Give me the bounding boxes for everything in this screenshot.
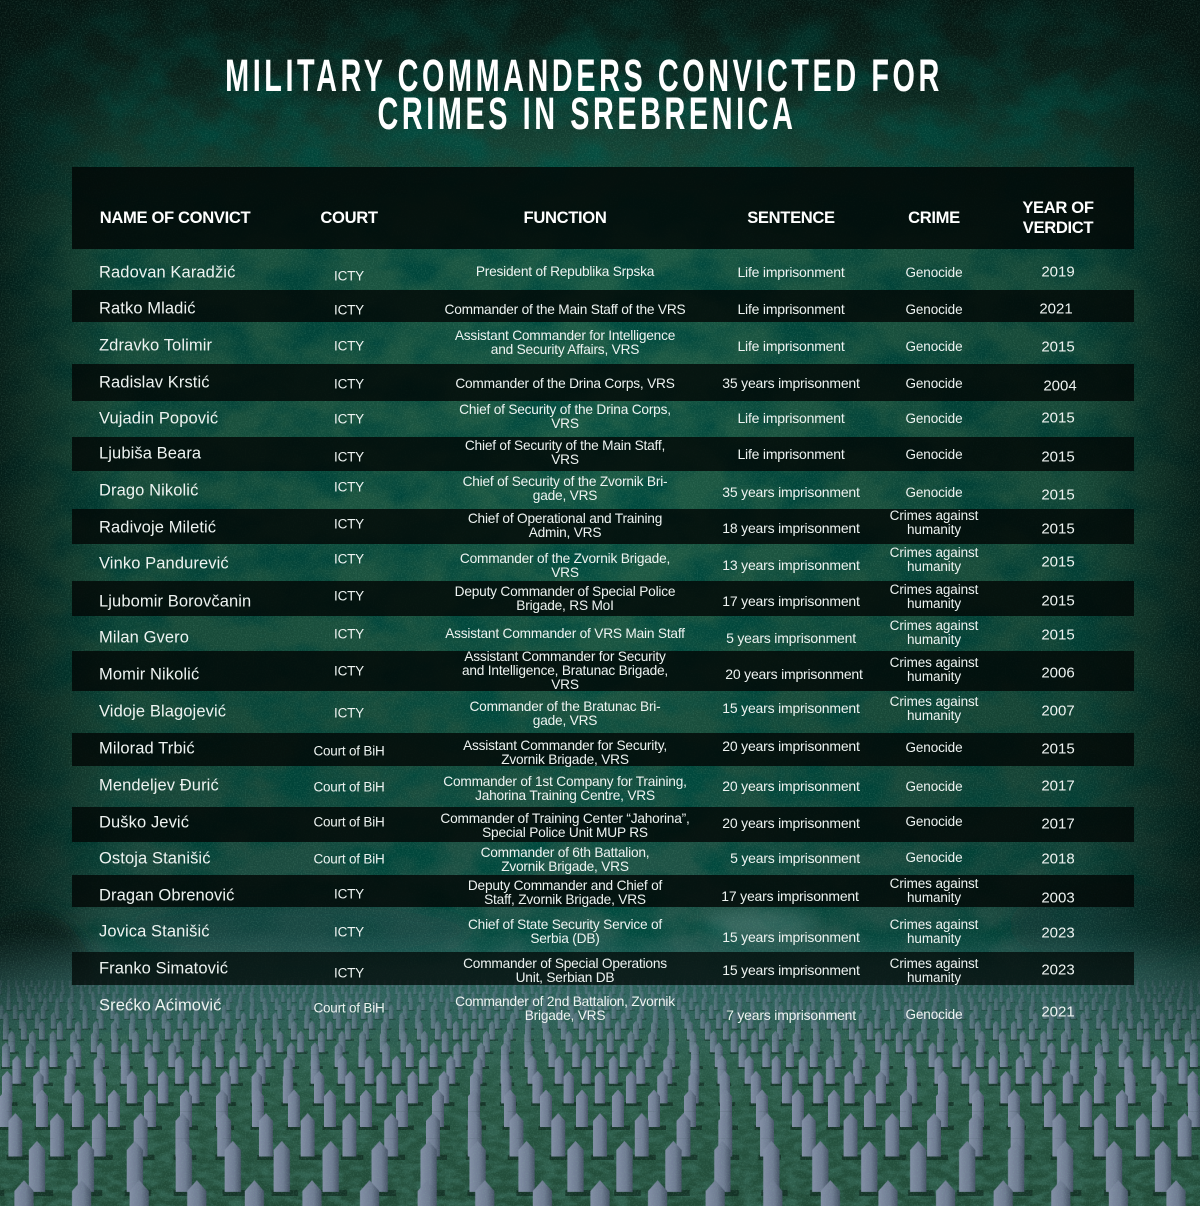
row: Franko Simatović: ICTY [334,966,364,980]
row: Jovica Stanišić [99,917,1075,946]
row: Ljubiša Beara: Life imprisonment [737,446,845,462]
row: Zdravko Tolimir: Zdravko Tolimir [99,336,212,354]
row: Duško Jević: Special Police Unit MUP RS [482,825,648,840]
row: Ljubomir Borovčanin: Brigade, RS MoI [516,598,614,613]
column heading: court: COURT [320,208,378,227]
row: Momir Nikolić: ICTY [334,664,364,678]
row: Ostoja Stanišić: Commander of 6th Battalion, [481,845,649,860]
row: Radivoje Miletić: Crimes against [890,508,978,523]
row: Ratko Mladić: Genocide [906,302,962,317]
row: Radislav Krstić: 35 years imprisonment [722,375,860,391]
row: Drago Nikolić: gade, VRS [533,488,597,503]
row: Franko Simatović: 2023 [1041,962,1075,978]
row: Drago Nikolić: 2015 [1041,486,1075,504]
cemetery headstones in perspective [0,979,1200,1206]
column heading: crime: CRIME [908,208,960,227]
row: Vujadin Popović: ICTY [334,412,364,426]
row: Jovica Stanišić: 15 years imprisonment [722,929,860,945]
row: Ostoja Stanišić: Genocide [906,850,962,865]
row: Ljubiša Beara: VRS [551,452,579,467]
row: Vujadin Popović: Life imprisonment [737,410,845,426]
row: Srećko Aćimović: Court of BiH [313,1000,385,1016]
row: Radivoje Miletić: Radivoje Miletić [99,518,216,536]
row: Mendeljev Đurić: Genocide [906,779,962,794]
row: Mendeljev Đurić: 2017 [1041,778,1075,794]
row: Mendeljev Đurić: Court of BiH [313,780,385,794]
row: Ostoja Stanišić: 5 years imprisonment [730,850,860,866]
row: Ratko Mladić: Life imprisonment [737,301,845,317]
row: Franko Simatović: Crimes against [890,956,978,971]
row: Vinko Pandurević: humanity [907,559,961,574]
row: Zdravko Tolimir: Assistant Commander for Intelligence [455,328,675,343]
row: Vidoje Blagojević: gade, VRS [533,713,597,728]
row: Milan Gvero: ICTY [334,626,364,642]
row: Dragan Obrenović: Deputy Commander and Chief of [468,878,662,893]
row: Vujadin Popović: VRS [551,416,579,431]
row: Jovica Stanišić: 2023 [1041,924,1075,942]
row: Milan Gvero: 2015 [1041,626,1075,644]
row: Ostoja Stanišić: 2018 [1041,850,1075,868]
row: Radivoje Miletić: 2015 [1041,520,1075,538]
row: Radovan Karadžić: President of Republika Srpska [476,264,654,279]
row: Radovan Karadžić: Radovan Karadžić [99,264,235,282]
row: Jovica Stanišić: Crimes against [890,917,978,932]
row: Ostoja Stanišić: Court of BiH [313,852,385,866]
column heading: name of convict: NAME OF CONVICT [100,208,250,227]
row: Vidoje Blagojević: humanity [907,708,961,723]
row: Ljubomir Borovčanin: ICTY [334,588,364,604]
row: Franko Simatović: Unit, Serbian DB [516,970,614,985]
row: Ljubomir Borovčanin: humanity [907,596,961,611]
row: Ljubiša Beara: ICTY [334,450,364,464]
row: Ostoja Stanišić: Ostoja Stanišić [99,850,211,868]
row: Dragan Obrenović: 2003 [1041,890,1075,906]
row: Milorad Trbić: Court of BiH [313,744,385,758]
row: Vinko Pandurević: 13 years imprisonment [722,557,860,573]
row: Vujadin Popović: Vujadin Popović [99,410,218,428]
row: Radovan Karadžić: Life imprisonment [737,264,845,280]
row: Vinko Pandurević: VRS [551,564,579,580]
column heading: year of verdict: VERDICT [1023,218,1093,237]
row: Momir Nikolić: 2006 [1041,664,1075,682]
row: Drago Nikolić: Genocide [906,485,962,500]
row: Jovica Stanišić: Jovica Stanišić [99,922,210,940]
row: Radislav Krstić: Genocide [906,376,962,391]
column heading: sentence: SENTENCE [747,208,835,227]
row: Franko Simatović: humanity [907,970,961,985]
row: Ljubomir Borovčanin [72,581,1134,616]
column heading: year of verdict [1022,198,1094,237]
row: Franko Simatović: 15 years imprisonment [722,962,860,978]
row: Vinko Pandurević: 2015 [1041,554,1075,570]
row: Radislav Krstić: 2004 [1043,378,1077,394]
row: Srećko Aćimović: Commander of 2nd Battalion, Zvornik [455,994,675,1009]
row: Milan Gvero: 5 years imprisonment [726,630,856,646]
row: Drago Nikolić: Drago Nikolić [99,482,198,500]
title [225,50,943,139]
row: Mendeljev Đurić [99,774,1075,803]
row: Jovica Stanišić: Chief of State Security Service of [468,917,662,932]
row: Vidoje Blagojević: 2007 [1041,702,1075,720]
row: Mendeljev Đurić: Jahorina Training Centre, VRS [475,788,655,803]
row: Ljubomir Borovčanin: Ljubomir Borovčanin [99,592,251,610]
row: Milan Gvero: Milan Gvero [99,628,189,646]
row: Ljubiša Beara: 2015 [1041,448,1075,466]
row: Franko Simatović [72,952,1134,985]
row: Momir Nikolić: humanity [907,669,961,684]
row: Dragan Obrenović: Dragan Obrenović [99,886,235,904]
row: Radislav Krstić: ICTY [334,376,364,392]
row: Dragan Obrenović [72,875,1134,907]
row: Vidoje Blagojević [99,694,1075,728]
row: Momir Nikolić: VRS [551,677,579,692]
row: Vidoje Blagojević: ICTY [334,706,364,720]
row: Ratko Mladić: Commander of the Main Staff of the VRS [445,302,685,317]
row: Duško Jević: Court of BiH [313,814,385,830]
row: Radivoje Miletić [72,509,1134,544]
row: Mendeljev Đurić: Mendeljev Đurić [99,776,219,794]
row: Radislav Krstić: Commander of the Drina Corps, VRS [455,376,675,391]
row: Radovan Karadžić [99,264,1075,284]
row: Dragan Obrenović: 17 years imprisonment [721,888,859,904]
row: Zdravko Tolimir: Life imprisonment [737,338,845,354]
column heading: year of verdict: YEAR OF [1022,198,1094,217]
row: Momir Nikolić: Assistant Commander for Security [464,649,666,664]
table of convicted commanders [72,167,1134,1023]
row: Vinko Pandurević: ICTY [334,552,364,566]
row: Vinko Pandurević: Crimes against [890,545,978,560]
row: Zdravko Tolimir: Genocide [906,339,962,354]
row: Dragan Obrenović: Staff, Zvornik Brigade, VRS [484,892,646,907]
row: Milorad Trbić: Assistant Commander for Security, [463,738,667,753]
row: Duško Jević: 20 years imprisonment [722,815,860,831]
row: Vinko Pandurević: Vinko Pandurević [99,554,229,572]
row: Milorad Trbić: Genocide [906,740,962,755]
row: Ljubomir Borovčanin: 2015 [1041,592,1075,610]
row: Radivoje Miletić: ICTY [334,516,364,532]
row: Momir Nikolić: 20 years imprisonment [725,666,863,682]
row: Ostoja Stanišić [99,845,1075,874]
row: Drago Nikolić [99,474,1075,504]
row: Radislav Krstić: Radislav Krstić [99,374,210,392]
lighter green glow behind title [270,95,930,175]
row: Momir Nikolić: and Intelligence, Bratunac Brigade, [462,663,668,678]
row: Radovan Karadžić: Genocide [906,265,962,280]
row: Vujadin Popović: Chief of Security of the Drina Corps, [459,402,671,417]
row: Vinko Pandurević: Commander of the Zvornik Brigade, [460,550,670,566]
row: Milan Gvero: Assistant Commander of VRS Main Staff [445,626,685,641]
row: Zdravko Tolimir: and Security Affairs, VRS [491,342,639,357]
row: Ratko Mladić: ICTY [334,302,364,318]
row: Srećko Aćimović: 7 years imprisonment [726,1007,856,1023]
row: Milorad Trbić [72,733,1134,766]
row: Ljubiša Beara [72,437,1134,471]
row: Momir Nikolić [72,651,1134,691]
row: Ljubomir Borovčanin: Deputy Commander of Special Police [455,584,675,599]
row: Franko Simatović: Commander of Special Operations [463,956,667,971]
row: Momir Nikolić: Momir Nikolić [99,666,199,684]
row: Drago Nikolić: 35 years imprisonment [722,484,860,500]
row: Milan Gvero: humanity [907,632,961,647]
row: Vidoje Blagojević: Commander of the Bratunac Bri- [469,699,661,714]
row: Milorad Trbić: Zvornik Brigade, VRS [501,752,629,767]
row: Ljubomir Borovčanin: 17 years imprisonment [722,593,860,609]
row: Srećko Aćimović: Genocide [906,1007,962,1022]
row: Vidoje Blagojević: Vidoje Blagojević [99,702,226,720]
title: CRIMES IN SREBRENICA [378,88,796,139]
row: Drago Nikolić: Chief of Security of the Zvornik Bri- [463,474,667,489]
row: Mendeljev Đurić: 20 years imprisonment [722,778,860,794]
row: Milan Gvero [99,618,1075,647]
row: Ratko Mladić: 2021 [1039,300,1073,318]
row: Vujadin Popović: 2015 [1041,410,1075,426]
column heading: function: FUNCTION [524,208,606,227]
grass texture [0,1030,1200,1206]
row: Zdravko Tolimir [99,328,1075,357]
row: Milan Gvero: Crimes against [890,618,978,633]
row: Radislav Krstić [72,364,1134,401]
row: Dragan Obrenović: Crimes against [890,876,978,891]
row: Duško Jević: Commander of Training Center “Jahorina”, [440,811,690,826]
row: Milorad Trbić: 2015 [1041,740,1075,758]
row: Ljubiša Beara: Chief of Security of the Main Staff, [465,438,665,453]
row: Milorad Trbić: Milorad Trbić [99,740,195,758]
row: Jovica Stanišić: ICTY [334,924,364,940]
row: Jovica Stanišić: humanity [907,931,961,946]
row: Zdravko Tolimir: 2015 [1041,338,1075,356]
row: Vidoje Blagojević: Crimes against [890,694,978,709]
row: Srećko Aćimović: 2021 [1041,1004,1075,1020]
row: Duško Jević: Genocide [906,814,962,829]
row: Momir Nikolić: Crimes against [890,655,978,670]
row: Radovan Karadžić: ICTY [334,268,364,284]
row: Vidoje Blagojević: 15 years imprisonment [722,700,860,716]
row: Radovan Karadžić: 2019 [1041,264,1075,280]
row: Jovica Stanišić: Serbia (DB) [530,931,600,946]
row: Duško Jević: Duško Jević [99,814,189,832]
row: Radivoje Miletić: Chief of Operational and Training [468,511,662,526]
row: Radivoje Miletić: 18 years imprisonment [722,520,860,536]
table header row [72,167,1134,249]
row: Srećko Aćimović: Srećko Aćimović [99,996,222,1014]
row: Srećko Aćimović [99,994,1075,1023]
row: Duško Jević [72,807,1134,842]
row: Dragan Obrenović: humanity [907,890,961,905]
row: Ratko Mladić: Ratko Mladić [99,300,196,318]
row: Dragan Obrenović: ICTY [334,886,364,902]
row: Ostoja Stanišić: Zvornik Brigade, VRS [501,859,629,874]
row: Duško Jević: 2017 [1041,816,1075,832]
row: Vinko Pandurević [99,545,1075,580]
row: Ljubiša Beara: Ljubiša Beara [99,444,201,462]
row: Ratko Mladić [72,290,1134,322]
row: Ljubiša Beara: Genocide [906,447,962,462]
row: Srećko Aćimović: Brigade, VRS [525,1008,605,1023]
row: Zdravko Tolimir: ICTY [334,338,364,354]
row: Milorad Trbić: 20 years imprisonment [722,738,860,754]
row: Vujadin Popović: Genocide [906,411,962,426]
row: Ljubomir Borovčanin: Crimes against [890,582,978,597]
row: Drago Nikolić: ICTY [334,480,364,494]
title: MILITARY COMMANDERS CONVICTED FOR [225,50,943,101]
row: Franko Simatović: Franko Simatović [99,960,228,978]
row: Radivoje Miletić: Admin, VRS [529,525,601,540]
row: Radivoje Miletić: humanity [907,522,961,537]
row: Vujadin Popović [99,402,1075,431]
distant tree line and hill [0,883,1200,1070]
row: Mendeljev Đurić: Commander of 1st Company for Training, [443,774,687,789]
